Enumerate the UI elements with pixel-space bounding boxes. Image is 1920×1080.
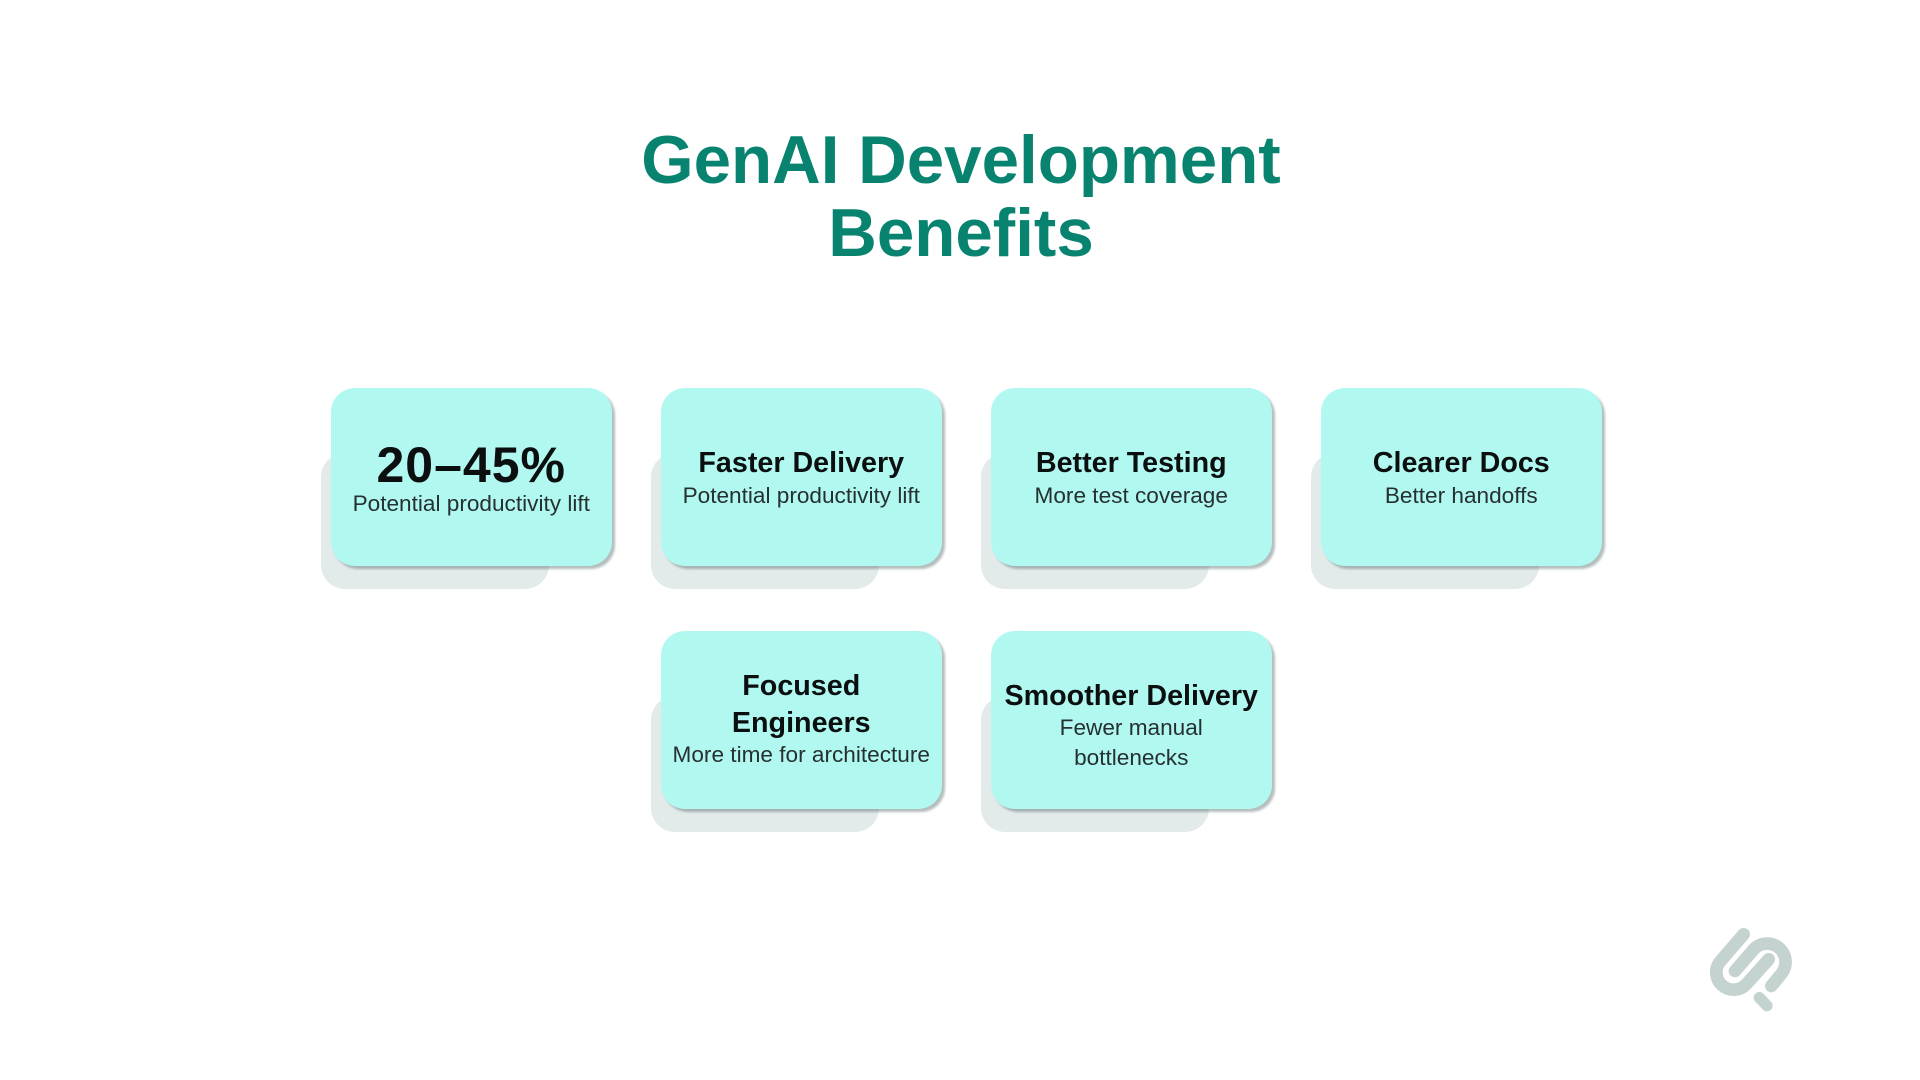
caption: More time for architecture <box>673 742 930 767</box>
card: smoother delivery <box>991 631 1272 809</box>
panel: productivity stat card <box>321 388 616 589</box>
panel: focused engineers card <box>651 631 946 832</box>
title: Benefits <box>828 196 1094 271</box>
card: better testing <box>991 388 1272 566</box>
title <box>641 123 1281 271</box>
stat value: 20–45% <box>376 437 566 493</box>
card: faster delivery <box>661 388 942 566</box>
caption: Better handoffs <box>1385 483 1538 508</box>
icon: logo mark <box>1710 928 1792 1012</box>
panel: smoother delivery card <box>981 631 1276 832</box>
heading: Better Testing <box>1036 447 1227 479</box>
stat caption: Potential productivity lift <box>353 491 590 516</box>
panel: faster delivery card <box>651 388 946 589</box>
panel: better testing card <box>981 388 1276 589</box>
caption: bottlenecks <box>1074 745 1188 770</box>
heading: Engineers <box>732 707 871 739</box>
card: 20–45% <box>331 388 612 566</box>
caption: Fewer manual <box>1060 715 1203 740</box>
heading: Faster Delivery <box>698 447 904 479</box>
heading: Focused <box>742 670 860 702</box>
heading: Smoother Delivery <box>1004 680 1258 712</box>
heading: Clearer Docs <box>1373 447 1550 479</box>
card: focused engineers <box>661 631 942 809</box>
title: GenAI Development <box>641 123 1281 198</box>
heading <box>732 670 871 739</box>
panel: clearer docs card <box>1311 388 1606 589</box>
card: clearer docs <box>1321 388 1602 566</box>
caption: More test coverage <box>1035 483 1228 508</box>
caption <box>1060 715 1203 770</box>
caption: Potential productivity lift <box>683 483 920 508</box>
